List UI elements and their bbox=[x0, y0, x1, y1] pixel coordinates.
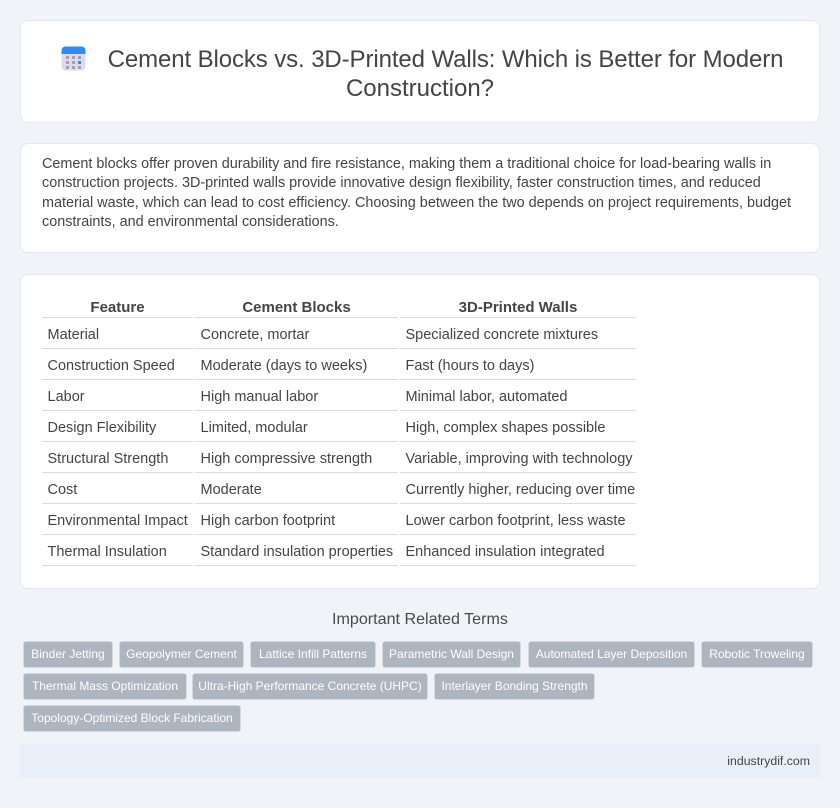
table: comparison: Concrete, mortar bbox=[200, 327, 309, 343]
tag list: related terms: Interlayer Bonding Strength bbox=[441, 679, 588, 693]
tag list: related terms: Thermal Mass Optimization bbox=[32, 679, 178, 693]
panel: comparison table bbox=[20, 274, 820, 589]
table: comparison: High manual labor bbox=[200, 389, 318, 405]
table: comparison: Structural Strength bbox=[48, 451, 168, 467]
table: comparison: Currently higher, reducing over time bbox=[406, 482, 635, 498]
table: comparison: Fast (hours to days) bbox=[406, 358, 534, 374]
table: comparison: Construction Speed bbox=[48, 358, 175, 374]
tag list: related terms: Binder Jetting bbox=[31, 647, 105, 661]
table: comparison: Design Flexibility bbox=[48, 420, 156, 436]
text block: description: constraints, and environmental considerations. bbox=[42, 214, 339, 230]
title: Construction? bbox=[346, 75, 494, 102]
table: comparison: Standard insulation properties bbox=[200, 544, 393, 560]
footer bbox=[20, 744, 820, 778]
table: comparison: High compressive strength bbox=[200, 451, 372, 467]
table: comparison: Moderate (days to weeks) bbox=[200, 358, 367, 374]
tag list: related terms: Lattice Infill Patterns bbox=[259, 647, 367, 661]
panel: description bbox=[20, 143, 820, 253]
table: comparison: 3D-Printed Walls bbox=[459, 299, 577, 316]
tag list: related terms: Parametric Wall Design bbox=[389, 647, 514, 661]
table: comparison: Environmental Impact bbox=[48, 513, 188, 529]
panel: header bbox=[20, 20, 820, 123]
tag list: related terms: Robotic Troweling bbox=[709, 647, 805, 661]
text block: description: Cement blocks offer proven durability and fire resistance, making them a traditional choice for load-bearing walls in bbox=[42, 156, 771, 172]
table: comparison: Specialized concrete mixtures bbox=[406, 327, 598, 343]
tag list: related terms: Ultra-High Performance Concrete (UHPC) bbox=[198, 679, 422, 693]
text block: description bbox=[42, 156, 791, 230]
table: comparison: Minimal labor, automated bbox=[406, 389, 568, 405]
text block: description: material waste, which can lead to cost efficiency. Choosing between the two depends on project requirements, budget bbox=[42, 195, 791, 211]
tag list: related terms bbox=[23, 641, 813, 732]
table: comparison: High carbon footprint bbox=[200, 513, 335, 529]
tag list: related terms: Automated Layer Deposition bbox=[536, 647, 687, 661]
table: comparison: Moderate bbox=[200, 482, 262, 498]
text block: description: construction projects. 3D-printed walls provide innovative design flexibility, faster construction times, and reduced bbox=[42, 175, 761, 191]
heading: related terms: Important Related Terms bbox=[332, 610, 508, 628]
table: comparison: Limited, modular bbox=[200, 420, 308, 436]
table: comparison: Feature bbox=[90, 299, 145, 316]
title bbox=[108, 46, 783, 102]
footer source text: industrydif.com bbox=[727, 754, 810, 768]
table: comparison: Thermal Insulation bbox=[48, 544, 167, 560]
table: comparison: Lower carbon footprint, less waste bbox=[406, 513, 626, 529]
table: comparison: Variable, improving with technology bbox=[406, 451, 633, 467]
table: comparison bbox=[42, 299, 636, 566]
icon: calendar bbox=[62, 46, 86, 70]
table: comparison: Cement Blocks bbox=[242, 299, 351, 316]
table: comparison: Labor bbox=[48, 389, 85, 405]
table: comparison: High, complex shapes possible bbox=[406, 420, 605, 436]
tag list: related terms: Topology-Optimized Block Fabrication bbox=[31, 711, 233, 725]
table: comparison: Cost bbox=[48, 482, 77, 498]
tag list: related terms: Geopolymer Cement bbox=[126, 647, 237, 661]
table: comparison: Enhanced insulation integrated bbox=[406, 544, 605, 560]
title: Cement Blocks vs. 3D-Printed Walls: Which is Better for Modern bbox=[108, 46, 783, 73]
table: comparison: Material bbox=[48, 327, 99, 343]
